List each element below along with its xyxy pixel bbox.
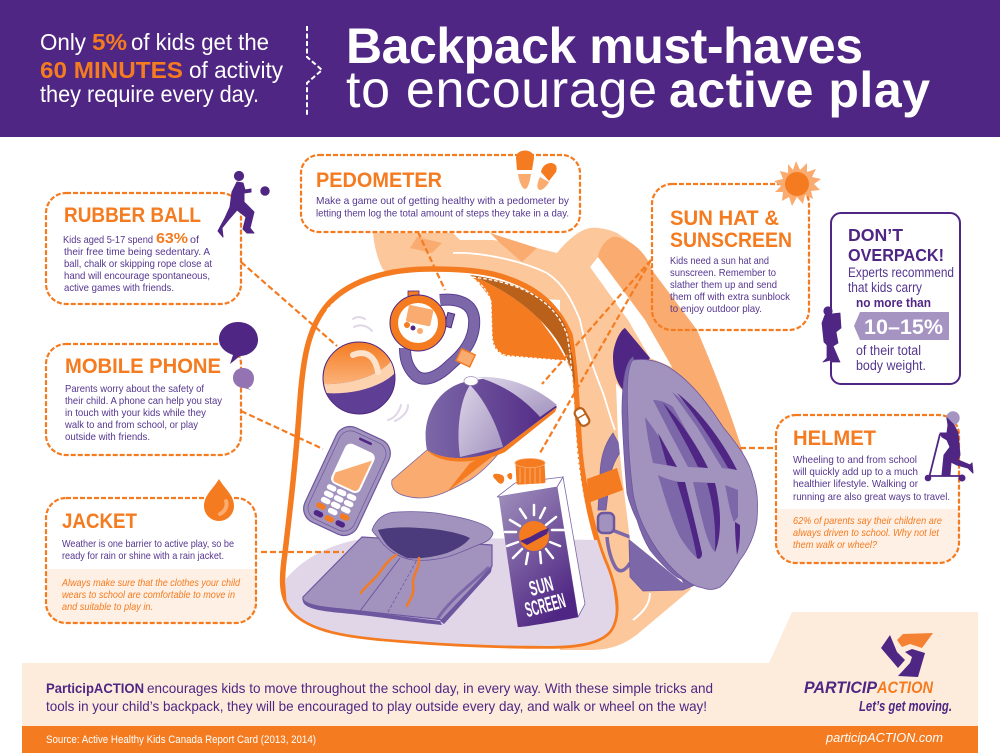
description: active games with friends. [64, 283, 174, 294]
helmet strap [587, 433, 630, 571]
logo wordmark: ACTION [876, 678, 934, 697]
helmet peak [613, 328, 650, 390]
tip text: always driven to school. Why not let [793, 528, 940, 539]
footer [22, 612, 978, 753]
heading: DON’T [848, 225, 903, 245]
footer message [46, 680, 713, 714]
sunscreen bottle [493, 458, 585, 627]
tip text [61, 578, 240, 613]
logo wordmark: PARTICIP [804, 678, 878, 697]
advice text: of their total [856, 343, 921, 358]
icon: water drop [204, 479, 234, 521]
description: Kids aged 5-17 spend [63, 235, 153, 246]
floor shadow [285, 537, 616, 650]
tip text: them walk or wheel? [793, 540, 877, 551]
description: Weather is one barrier to active play, so be [62, 539, 234, 550]
panel: helmet [776, 411, 973, 563]
description [62, 539, 234, 562]
description [792, 455, 950, 503]
panel: mobile phone [46, 322, 258, 455]
bicycle helmet [613, 328, 758, 591]
advice text: body weight. [856, 358, 926, 373]
description: ball, chalk or skipping rope close at [64, 259, 212, 270]
callout: 10-15%: 10–15% [864, 316, 943, 339]
panel: don't overpack [822, 213, 960, 384]
statistic text: Only [40, 29, 86, 55]
description: of [190, 235, 199, 246]
panel: jacket [46, 479, 256, 623]
heading: RUBBER BALL [64, 203, 201, 227]
title: Backpack must-haves [346, 18, 863, 74]
sunscreen label: SCREEN [523, 589, 568, 622]
zipper pull [573, 407, 591, 427]
description: their free time being sedentary. A [64, 247, 210, 258]
title: active play [669, 62, 930, 118]
helmet white crescent [616, 383, 683, 583]
statistic text: 60 MINUTES [40, 57, 183, 83]
tip text: and suitable to play in. [62, 602, 153, 613]
panel: sun hat and sunscreen [652, 161, 821, 330]
open zipper flap [327, 275, 592, 540]
logo wordmark [804, 678, 952, 715]
description [64, 384, 223, 443]
helmet chin guard [629, 540, 695, 591]
icon: footprints [516, 150, 557, 190]
title [346, 18, 930, 119]
mobile phone [299, 422, 395, 540]
description: in touch with your kids while they [65, 408, 207, 419]
sunscreen sun logo [505, 505, 564, 564]
description [316, 196, 570, 220]
description: running are also great ways to travel. [793, 492, 950, 503]
logo mark [881, 633, 933, 677]
description: sunscreen. Remember to [670, 268, 776, 279]
source bar [22, 726, 978, 753]
icon: child with backpack [822, 307, 841, 362]
statistic text [40, 29, 283, 107]
panel: pedometer [301, 150, 580, 232]
description: 63% [156, 230, 188, 247]
connector lines [241, 232, 776, 552]
main compartment [283, 269, 616, 646]
heading [848, 225, 944, 265]
description: will quickly add up to a much [792, 467, 918, 478]
folded rain jacket [303, 512, 493, 625]
footer peach panel [22, 612, 978, 726]
advice text [848, 265, 954, 373]
heading [670, 206, 792, 252]
advice text: that kids carry [848, 280, 922, 295]
icon: sun [774, 161, 821, 206]
description: them off with extra sunblock [670, 292, 791, 303]
heading: JACKET [62, 509, 137, 533]
heading: PEDOMETER [316, 168, 442, 192]
footer message: tools in your child’s backpack, they will be encouraged to play outside every day, and walk or wheel on the way! [46, 698, 707, 714]
statistic text: of kids get the [131, 29, 269, 55]
tip text [793, 516, 942, 551]
icon: running child and ball [218, 171, 269, 237]
advice text: Experts recommend [848, 265, 954, 280]
header band [0, 0, 1000, 137]
tip text: wears to school are comfortable to move in [62, 590, 235, 601]
description: Parents worry about the safety of [65, 384, 204, 395]
backpack rear body and straps [373, 228, 743, 650]
footer message: ParticipACTION [46, 680, 144, 696]
description: their child. A phone can help you stay [65, 396, 223, 407]
phone keypad [312, 482, 359, 529]
description: hand will encourage spontaneous, [64, 271, 210, 282]
title: to encourage [346, 61, 657, 119]
description: walk to and from school, or play [64, 420, 199, 431]
statistic text: of activity [189, 57, 283, 83]
backpack illustration [283, 228, 758, 650]
description: Kids need a sun hat and [670, 256, 769, 267]
heading: SUN HAT & [670, 206, 779, 230]
callout: 10-15% [854, 312, 949, 340]
heading: OVERPACK! [848, 245, 944, 265]
pedometer watch [390, 291, 475, 379]
sunscreen label: SUN [527, 573, 556, 601]
statistic text: they require every day. [40, 81, 259, 107]
description: Make a game out of getting healthy with a pedometer by [316, 196, 570, 207]
heading: SUNSCREEN [670, 228, 792, 252]
rubber ball [323, 317, 408, 421]
description: to enjoy outdoor play. [670, 304, 762, 315]
panel: rubber ball [46, 171, 269, 304]
logo wordmark: Let’s get moving. [859, 698, 952, 715]
tip text: Always make sure that the clothes your child [61, 578, 240, 589]
description: ready for rain or shine with a rain jacket. [62, 551, 224, 562]
cap [392, 376, 557, 498]
dashed arrow divider [307, 26, 322, 115]
helmet rim [622, 357, 720, 587]
icon: speech bubbles [219, 322, 258, 390]
description: Wheeling to and from school [793, 455, 917, 466]
helmet shell [627, 359, 758, 589]
description: outside with friends. [65, 432, 150, 443]
description: healthier lifestyle. Walking or [793, 479, 919, 490]
description: slather them up and send [670, 280, 777, 291]
description [63, 230, 212, 294]
tip text: 62% of parents say their children are [793, 516, 942, 527]
logo [804, 633, 952, 715]
footer message: encourages kids to move throughout the school day, in every way. With these simple tricks and [147, 680, 713, 696]
advice text: no more than [856, 296, 931, 310]
helmet vents [645, 392, 740, 559]
description: letting them log the total amount of steps they take in a day. [316, 208, 569, 220]
statistic text: 5% [92, 29, 127, 55]
sunscreen label [523, 573, 568, 622]
icon: child on scooter [925, 411, 973, 482]
heading: MOBILE PHONE [65, 354, 221, 378]
source bar: participACTION.com [825, 730, 943, 745]
source bar: Source: Active Healthy Kids Canada Report Card (2013, 2014) [46, 734, 316, 746]
heading: HELMET [793, 426, 876, 450]
description [670, 256, 791, 315]
